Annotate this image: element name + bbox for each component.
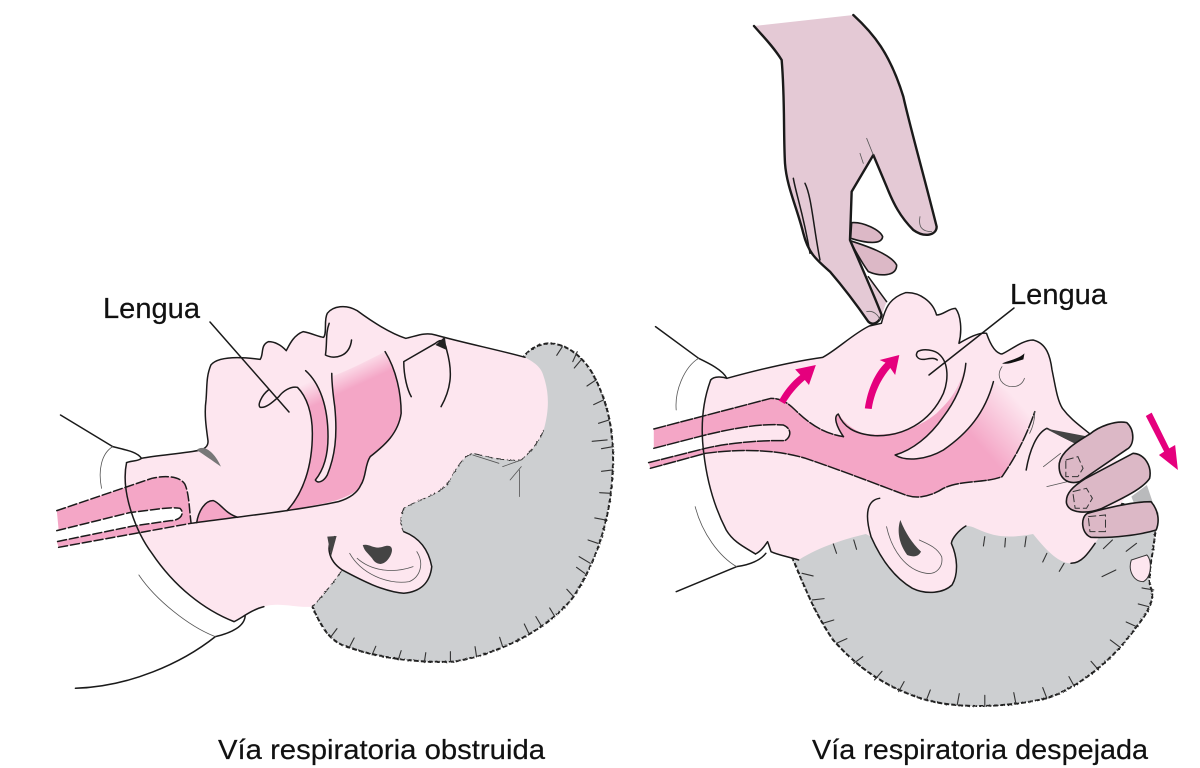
outlines: left face <box>127 307 525 463</box>
figure: open airway head <box>649 293 1178 707</box>
caption: obstructed airway: Vía respiratoria obstruida <box>218 734 545 765</box>
arrow: forehead push <box>1146 413 1178 470</box>
airway: open passage with gradient <box>649 363 1035 497</box>
hair texture: right edge ticks <box>802 537 1154 707</box>
airway: trachea and esophagus bands <box>57 477 191 547</box>
airway: gap between tubes <box>57 508 182 542</box>
label: Lengua, left <box>103 293 289 412</box>
hand: lifting the jaw <box>754 15 937 324</box>
nose and eye: right <box>999 353 1088 487</box>
airway: epiglottis <box>197 501 238 523</box>
outlines: left collar and shoulders <box>61 415 264 688</box>
ear: right <box>868 498 966 592</box>
caption: clear airway: Vía respiratoria despejada <box>812 734 1148 765</box>
skin: left face and neck <box>124 307 548 622</box>
eye: left closed <box>404 341 450 407</box>
hair line: left gray boundary <box>312 430 544 607</box>
label: Lengua, right: Lengua <box>1010 279 1108 311</box>
ear: left <box>329 527 432 593</box>
hair texture: left edge ticks <box>331 347 613 663</box>
arrow: tongue lift <box>865 355 899 409</box>
fingers: right, tilting the head <box>1059 422 1158 582</box>
palate: right soft palate <box>895 363 993 459</box>
airway: pharynx with gradient <box>286 352 401 511</box>
outlines: right face <box>711 293 1090 434</box>
tongue: right, lifted forward <box>836 350 947 437</box>
palate: left soft palate <box>306 371 336 482</box>
label: Lengua, left: Lengua <box>103 293 201 325</box>
hair: left head <box>312 343 613 662</box>
outlines: right collar and shoulders <box>656 327 766 592</box>
figure: obstructed airway head <box>57 307 613 688</box>
leader line: left tongue <box>210 322 289 412</box>
hair: right head <box>792 480 1157 706</box>
label: Lengua, right <box>929 279 1108 375</box>
skin: right face and neck <box>702 293 1137 592</box>
arrow: neck lift <box>779 365 816 404</box>
tongue: left, blocking the airway <box>259 387 312 511</box>
airway: outlines of tubes and passage <box>649 398 1035 497</box>
leader line: right tongue <box>929 308 1014 375</box>
outlines: lower airway and nose <box>191 323 401 523</box>
